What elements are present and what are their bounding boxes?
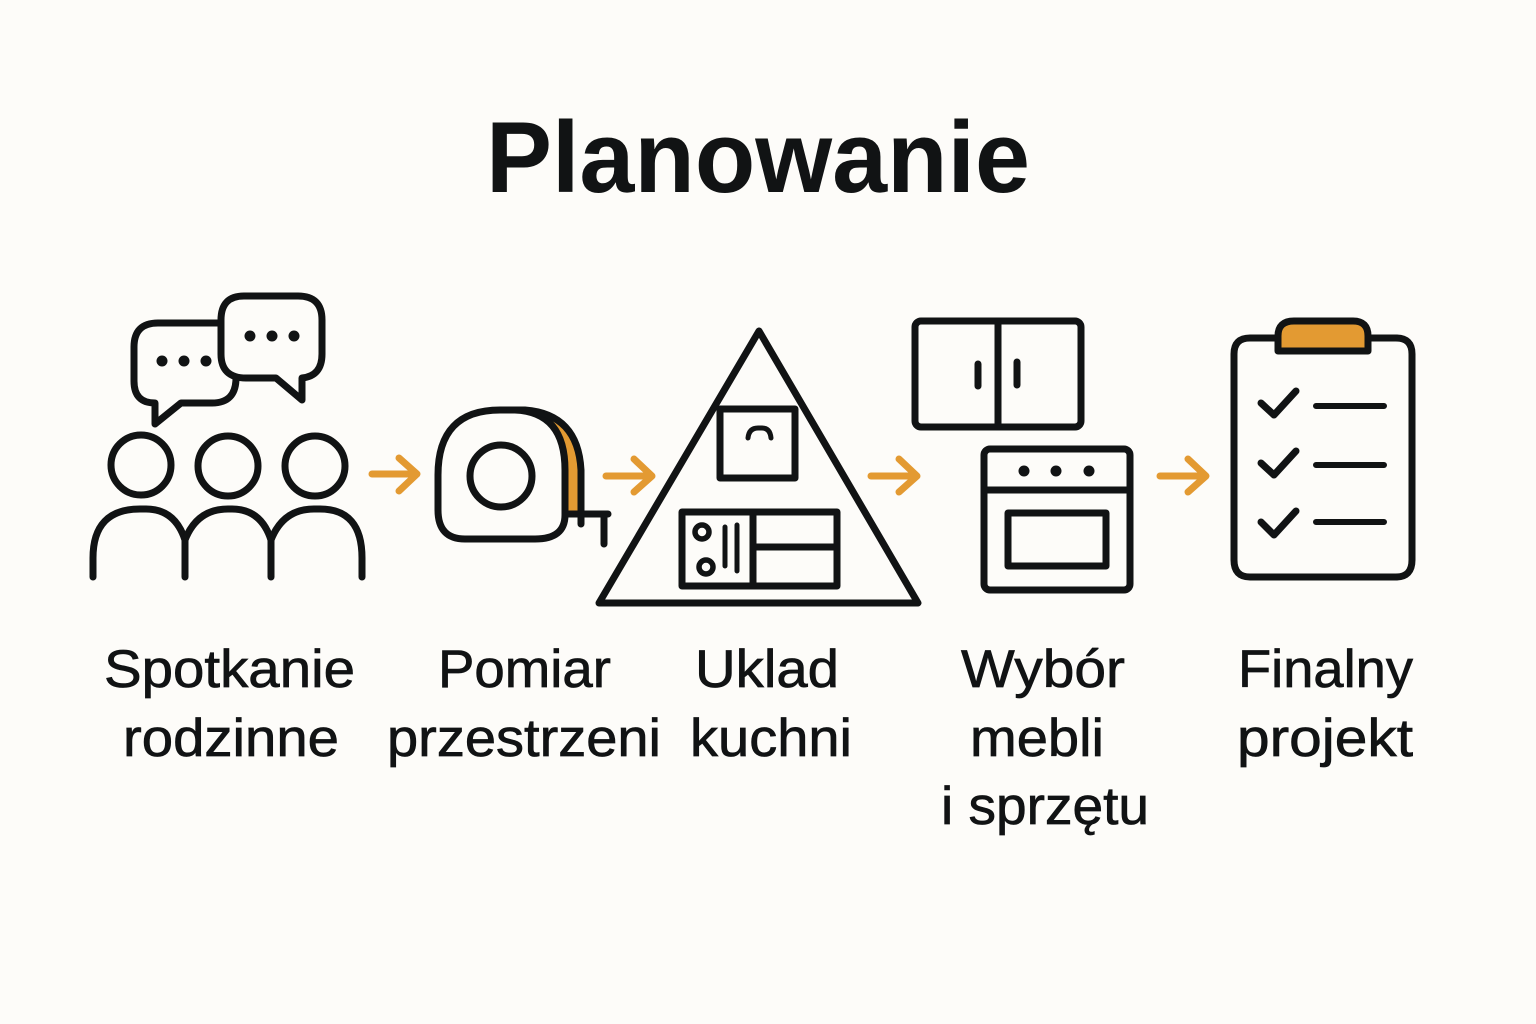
arrow 1	[372, 458, 417, 491]
label: Pomiar przestrzeni: Pomiar	[438, 640, 611, 699]
label: Pomiar przestrzeni	[387, 640, 661, 768]
icon: clipboard checklist	[1234, 321, 1412, 577]
label: Finalny projekt: projekt	[1237, 709, 1413, 768]
label: Uklad kuchni: Uklad	[695, 640, 839, 699]
icon: family meeting	[93, 296, 362, 577]
label: Finalny projekt	[1237, 640, 1414, 768]
label: Uklad kuchni	[690, 640, 852, 768]
arrow 2	[606, 459, 652, 492]
label: Pomiar przestrzeni: przestrzeni	[387, 709, 661, 768]
arrow 3	[871, 459, 917, 492]
label: Wybór mebli i sprzętu: i sprzętu	[941, 777, 1149, 836]
icon: cabinet and oven	[915, 321, 1130, 590]
label: Uklad kuchni: kuchni	[690, 709, 852, 768]
label: Wybór mebli i sprzętu: Wybór	[961, 640, 1125, 699]
label: Spotkanie rodzinne: Spotkanie	[104, 640, 355, 699]
title: Planowanie	[486, 102, 1030, 214]
label: Wybór mebli i sprzętu: mebli	[970, 709, 1104, 768]
label: Spotkanie rodzinne: rodzinne	[123, 709, 339, 768]
icon: tape measure	[438, 410, 608, 544]
icon: kitchen layout triangle	[599, 331, 918, 603]
label: Wybór mebli i sprzętu	[941, 640, 1149, 836]
label: Finalny projekt: Finalny	[1238, 640, 1414, 699]
arrow 4	[1160, 459, 1206, 492]
label: Spotkanie rodzinne	[104, 640, 355, 768]
